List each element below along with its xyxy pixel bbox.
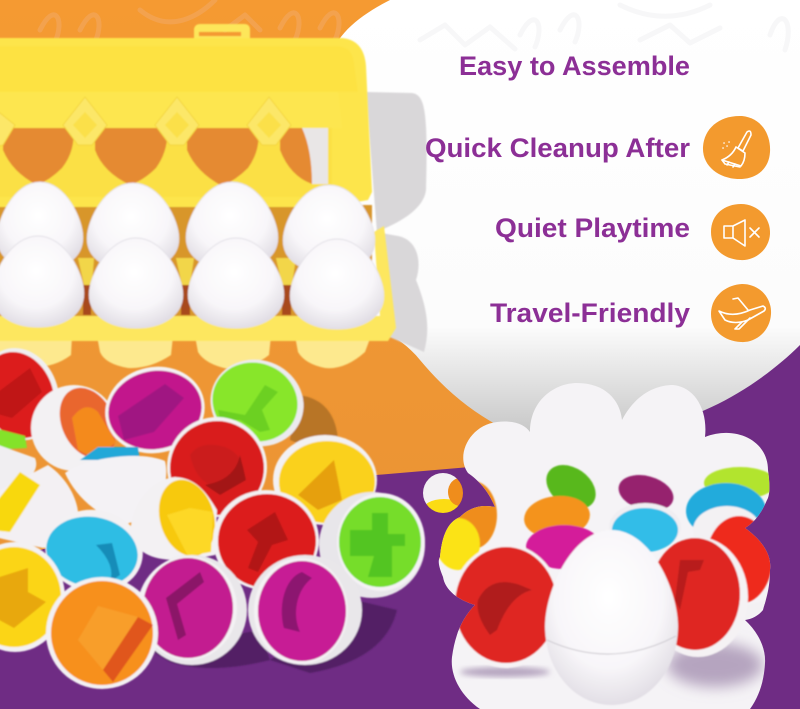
tray cast shadow on white xyxy=(366,92,427,352)
small circle inset xyxy=(423,473,463,513)
green fragment left xyxy=(0,427,27,450)
egg back row 2 xyxy=(87,183,179,271)
tray lid band xyxy=(0,92,342,128)
red half top left xyxy=(0,337,72,451)
blurred magenta egg xyxy=(618,474,674,508)
egg tray xyxy=(0,24,396,369)
blurred yellow egg xyxy=(436,518,480,570)
cloud white shape xyxy=(439,383,770,709)
icon: airplane xyxy=(711,284,771,342)
yellow half in white shell xyxy=(131,473,224,563)
magenta half with crescent xyxy=(248,555,362,665)
pile of open eggs xyxy=(0,337,425,689)
magenta half with diamond xyxy=(97,358,213,462)
tray handle tab xyxy=(194,24,250,38)
tray base right edge and front rim xyxy=(0,226,396,341)
tray inner panel xyxy=(0,128,332,197)
cloud photo inset xyxy=(420,383,776,709)
label: easy to assemble: Easy to Assemble xyxy=(459,51,690,81)
blurred magenta egg front xyxy=(526,525,602,569)
red half with flower xyxy=(167,417,267,517)
white shell left with yellow block xyxy=(0,465,78,548)
background: white blob xyxy=(330,0,800,436)
magenta half with L shape xyxy=(137,555,247,665)
egg back row 1 xyxy=(0,182,83,270)
tray feet xyxy=(0,336,371,369)
label: quick cleanup after: Quick Cleanup After xyxy=(425,133,691,163)
icon: broom xyxy=(703,116,770,179)
cloud contents xyxy=(436,456,776,705)
label: travel-friendly: Travel-Friendly xyxy=(490,298,690,328)
shadows on purple xyxy=(150,600,397,673)
egg back row 4 xyxy=(283,185,375,273)
cyan half xyxy=(39,502,149,600)
feature text list xyxy=(425,51,691,328)
orange half with pentagon xyxy=(46,577,158,689)
ground shadow right xyxy=(667,643,763,687)
eggs in tray xyxy=(0,182,384,329)
white shell far left xyxy=(0,442,36,490)
tray base interior xyxy=(0,205,372,325)
ground shadow left xyxy=(460,667,550,677)
blurred orange egg left xyxy=(456,480,498,548)
egg front row 3 xyxy=(188,238,284,328)
blurred cyan egg front xyxy=(612,502,678,544)
red half left xyxy=(451,544,561,668)
egg front row 2 xyxy=(89,238,183,328)
blurred red egg back xyxy=(706,516,772,604)
cyan egg inner white xyxy=(692,504,758,538)
yellow half with star xyxy=(0,542,65,652)
background scribble pattern xyxy=(40,0,788,50)
red half with arrow xyxy=(213,490,319,590)
white glimpse through last opening xyxy=(302,128,328,184)
blurred cyan egg xyxy=(684,482,766,528)
tray lid xyxy=(0,38,372,207)
white shell under back red egg xyxy=(746,600,766,620)
yellow half with triangle xyxy=(273,435,377,525)
egg seam xyxy=(547,636,676,654)
blurred green egg xyxy=(545,464,597,508)
lid upper recess xyxy=(0,46,358,92)
egg front row 4 xyxy=(290,239,384,329)
green half with cross xyxy=(198,347,316,459)
icon: muted speaker xyxy=(711,204,770,260)
tray openings showing the orange background xyxy=(3,128,328,186)
cyan piece on shell xyxy=(80,447,140,460)
center white egg xyxy=(545,530,678,705)
label: quiet playtime: Quiet Playtime xyxy=(495,213,690,243)
shadow on orange xyxy=(290,395,338,460)
red half right xyxy=(648,537,748,657)
white shell with orange inner xyxy=(31,378,127,471)
blurred lime egg xyxy=(704,467,776,499)
blurred orange egg xyxy=(523,494,591,534)
background: purple field xyxy=(0,340,800,709)
white shell center xyxy=(65,456,166,524)
tray base dark gaps xyxy=(83,285,291,315)
diamond latches xyxy=(0,97,291,148)
tray base yellow dividers xyxy=(78,258,296,285)
green half with cross xyxy=(319,492,425,598)
egg front row 1 xyxy=(0,236,84,327)
egg back row 3 xyxy=(186,182,278,270)
latch inner diamonds xyxy=(73,112,281,138)
